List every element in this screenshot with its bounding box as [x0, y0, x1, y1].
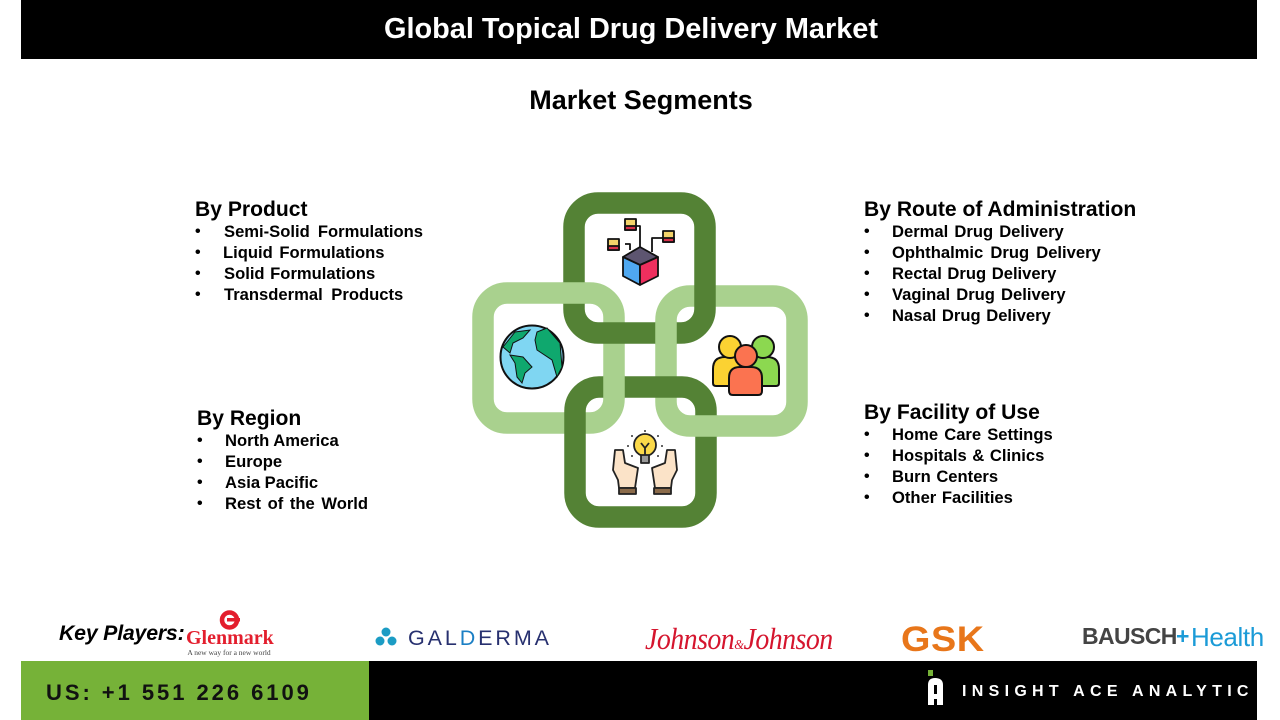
ring overlap: left over bottom: [603, 376, 625, 398]
list: facilities: Other Facilities: [892, 488, 1013, 507]
icon: bulb sparks: [627, 430, 663, 457]
panel: by facility of use: [864, 401, 1053, 507]
list: routes: Ophthalmic Drug Delivery: [892, 243, 1101, 262]
footer contact: phone: [21, 661, 369, 720]
list: routes: •: [864, 307, 870, 324]
list: routes: •: [864, 265, 870, 282]
panel: by route of administration: [864, 198, 1136, 325]
heading: by product: By Product: [195, 198, 308, 221]
list: product segments: [195, 222, 423, 304]
list: regions: Asia Pacific: [225, 473, 318, 492]
logo: johnson and johnson: Johnson&Johnson: [645, 621, 833, 656]
logo text: glenmark: Glenmark: [186, 627, 274, 649]
logo: galderma: [376, 626, 552, 650]
list: regions: •: [197, 453, 203, 470]
ring overlap: right over top: [655, 322, 677, 344]
list: regions: •: [197, 432, 203, 449]
list: routes: •: [864, 286, 870, 303]
logo text: galderma: GALDERMA: [408, 626, 552, 650]
logo mark: glenmark G: [220, 610, 240, 630]
logo: gsk: GSK: [901, 620, 985, 659]
list: regions: •: [197, 474, 203, 491]
icon: globe: [500, 326, 564, 388]
ring overlap: right over bottom: [694, 415, 718, 437]
list: routes: Vaginal Drug Delivery: [892, 285, 1066, 304]
footer bar: [21, 661, 1257, 720]
list: product segments: •: [195, 244, 201, 261]
list: routes: Dermal Drug Delivery: [892, 222, 1064, 241]
icon: people group: [713, 336, 779, 395]
logo text: health: Health: [1191, 622, 1264, 652]
list: facilities: •: [864, 426, 870, 443]
footer brand icon: [928, 670, 943, 705]
label: key players: Key Players:: [59, 621, 184, 645]
list: product segments: •: [195, 286, 201, 303]
list: facilities: [864, 425, 1053, 507]
title bar: Global Topical Drug Delivery Market: [384, 13, 878, 45]
list: facilities: Burn Centers: [892, 467, 998, 486]
ring: right light green: [666, 296, 797, 426]
icon: product cube with tags: [608, 219, 674, 285]
icon: hands holding light bulb: [613, 434, 677, 494]
list: facilities: •: [864, 447, 870, 464]
heading: by region: By Region: [197, 407, 301, 430]
logo: bausch health: [1082, 622, 1264, 652]
ring: bottom dark green: [575, 387, 706, 517]
footer contact: phone: US: +1 551 226 6109: [46, 680, 312, 705]
panel: by product: [195, 198, 423, 304]
list: product segments: Transdermal Products: [224, 285, 403, 304]
ring: top dark green: [574, 203, 705, 333]
list: product segments: Semi-Solid Formulations: [224, 222, 423, 241]
title bar: [21, 0, 1257, 59]
heading: by route: By Route of Administration: [864, 198, 1136, 221]
list: routes: Rectal Drug Delivery: [892, 264, 1056, 283]
list: regions: •: [197, 495, 203, 512]
list: product segments: •: [195, 223, 201, 240]
logo tagline: glenmark: A new way for a new world: [187, 648, 271, 657]
list: regions: Europe: [225, 452, 282, 471]
list: facilities: Hospitals & Clinics: [892, 446, 1044, 465]
logo text: bausch: BAUSCH: [1082, 623, 1177, 649]
logo mark: galderma dots: [376, 628, 396, 646]
list: routes: [864, 222, 1101, 325]
logo: glenmark: [186, 610, 274, 657]
list: product segments: •: [195, 265, 201, 282]
list: product segments: Liquid Formulations: [223, 243, 384, 262]
logo plus: +: [1176, 623, 1189, 649]
list: routes: Nasal Drug Delivery: [892, 306, 1051, 325]
list: facilities: •: [864, 489, 870, 506]
list: product segments: Solid Formulations: [224, 264, 375, 283]
subtitle: market segments: Market Segments: [529, 85, 753, 115]
list: facilities: Home Care Settings: [892, 425, 1053, 444]
list: facilities: •: [864, 468, 870, 485]
list: regions: [197, 431, 368, 513]
heading: by facility: By Facility of Use: [864, 401, 1040, 424]
ring: left light green: [483, 293, 614, 423]
list: routes: •: [864, 244, 870, 261]
ring overlap: left over top: [562, 282, 586, 304]
footer brand name: INSIGHT ACE ANALYTIC: [962, 683, 1254, 700]
panel: by region: [197, 407, 368, 513]
list: regions: Rest of the World: [225, 494, 368, 513]
list: routes: •: [864, 223, 870, 240]
list: regions: North America: [225, 431, 339, 450]
